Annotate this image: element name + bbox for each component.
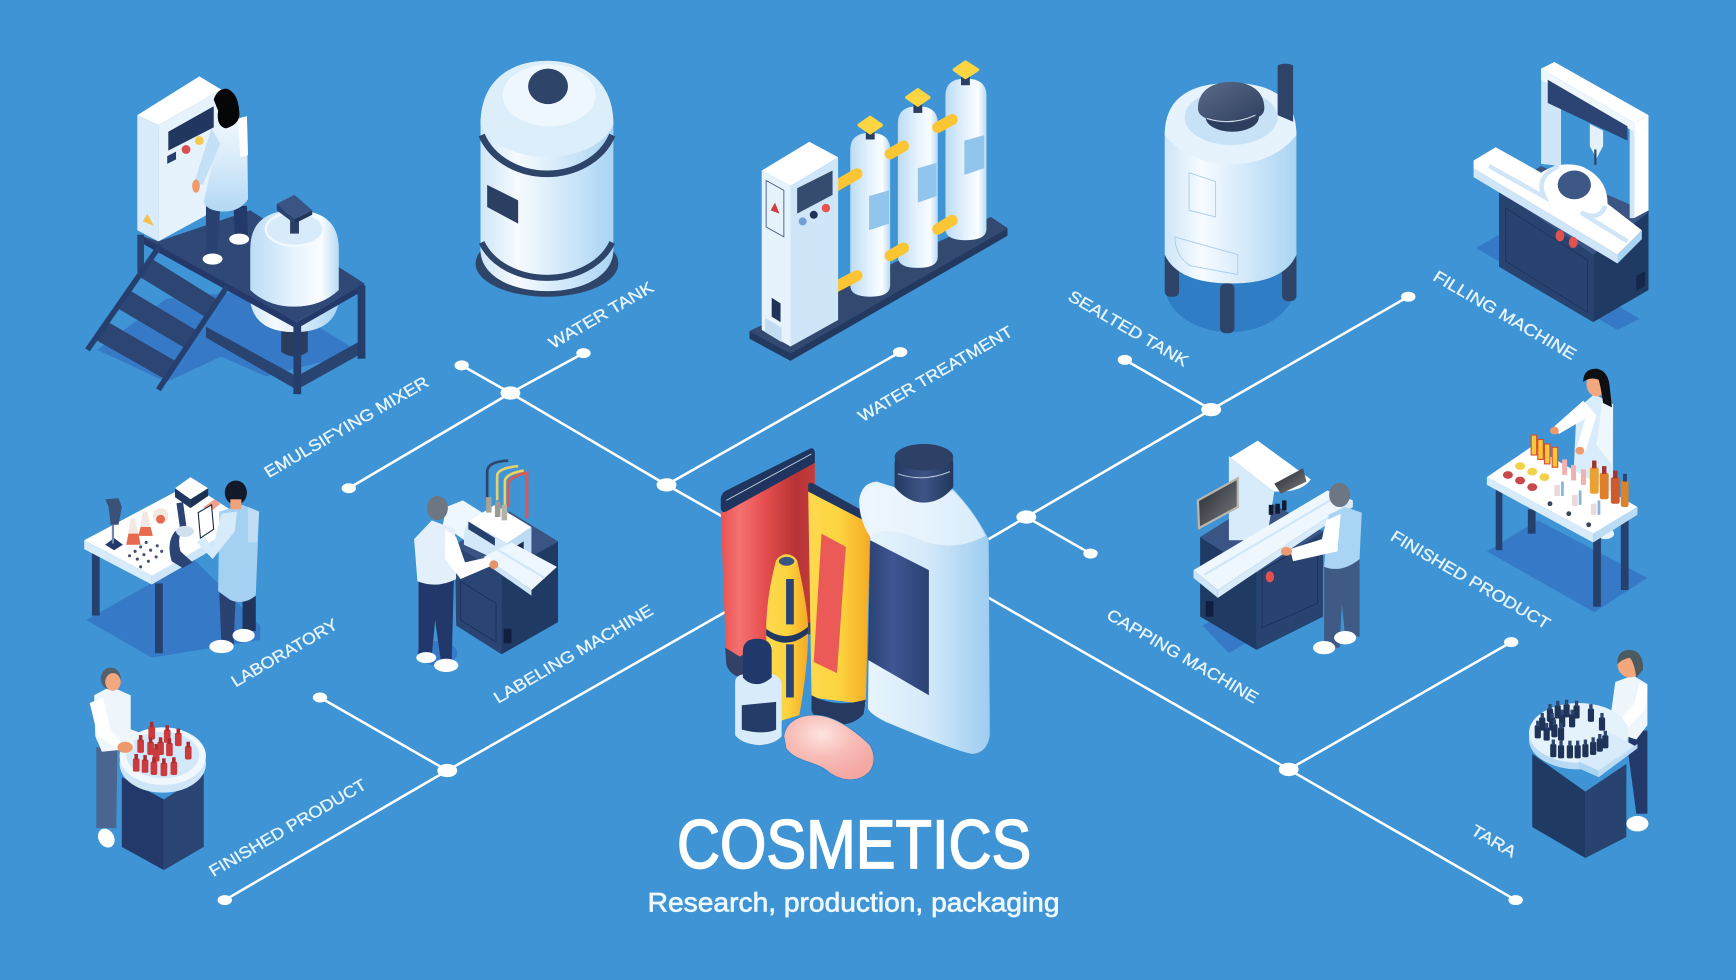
label: sealted tank: SEALTED TANK	[1065, 287, 1192, 370]
capping head	[1198, 441, 1311, 540]
molecule	[128, 541, 163, 568]
label: finished product right: FINISHED PRODUCT	[1387, 527, 1554, 633]
stand and flasks	[105, 498, 168, 550]
label: filling machine: FILLING MACHINE	[1430, 267, 1580, 363]
water tank illustration	[476, 61, 618, 297]
operator	[90, 668, 142, 753]
laboratory illustration	[84, 477, 260, 658]
label: tara: TARA	[1468, 821, 1520, 861]
pipes	[836, 120, 952, 287]
sealed tank illustration	[1165, 64, 1296, 333]
scientist	[1550, 369, 1614, 539]
conveyor track	[1474, 147, 1642, 263]
microscope	[170, 502, 194, 568]
dropper bottle	[735, 639, 782, 745]
operator	[1608, 650, 1649, 831]
capping machine illustration	[1193, 441, 1362, 654]
title: COSMETICS	[677, 806, 1031, 883]
lab technician	[197, 480, 259, 653]
red tube	[721, 448, 815, 678]
emulsifying mixer illustration	[87, 76, 365, 394]
frame	[1541, 62, 1649, 218]
yellow tube	[808, 483, 870, 724]
colored tubes	[487, 461, 527, 518]
finished product station (right)	[1487, 369, 1647, 612]
small mixing tank	[250, 195, 339, 307]
filter cylinders	[850, 62, 986, 297]
control cabinet	[762, 142, 838, 347]
soap	[784, 715, 874, 780]
staircase	[87, 245, 227, 390]
flowchart connector lines	[218, 292, 1523, 905]
shampoo bottle	[859, 444, 990, 754]
label: laboratory: LABORATORY	[228, 615, 341, 691]
label: water tank: WATER TANK	[545, 278, 657, 352]
scale box	[175, 477, 220, 513]
label: finished product left: FINISHED PRODUCT	[206, 775, 370, 880]
label: labeling machine: LABELING MACHINE	[490, 601, 656, 707]
filling machine illustration	[1474, 62, 1649, 330]
mascara	[766, 554, 808, 722]
label: capping machine: CAPPING MACHINE	[1103, 606, 1262, 707]
table products	[1503, 435, 1629, 527]
navy bottles	[1535, 700, 1608, 758]
tara station illustration	[1529, 650, 1649, 858]
label: water treatment: WATER TREATMENT	[855, 322, 1017, 425]
back conveyor	[443, 500, 498, 545]
red bottles	[133, 722, 192, 776]
labeling machine illustration	[414, 461, 558, 672]
conveyor	[1193, 490, 1353, 590]
label: emulsifying mixer: EMULSIFYING MIXER	[261, 373, 432, 481]
operator	[1281, 483, 1362, 654]
control cabinet	[137, 76, 221, 241]
subtitle: Research, production, packaging	[648, 888, 1060, 918]
front conveyor	[484, 542, 557, 590]
central cosmetics products	[721, 444, 990, 780]
machine head	[464, 497, 531, 567]
scientist on platform	[192, 89, 249, 265]
water treatment illustration	[750, 62, 1007, 361]
lid	[1198, 82, 1264, 132]
finished product station (left)	[90, 668, 206, 870]
operator	[414, 496, 498, 672]
